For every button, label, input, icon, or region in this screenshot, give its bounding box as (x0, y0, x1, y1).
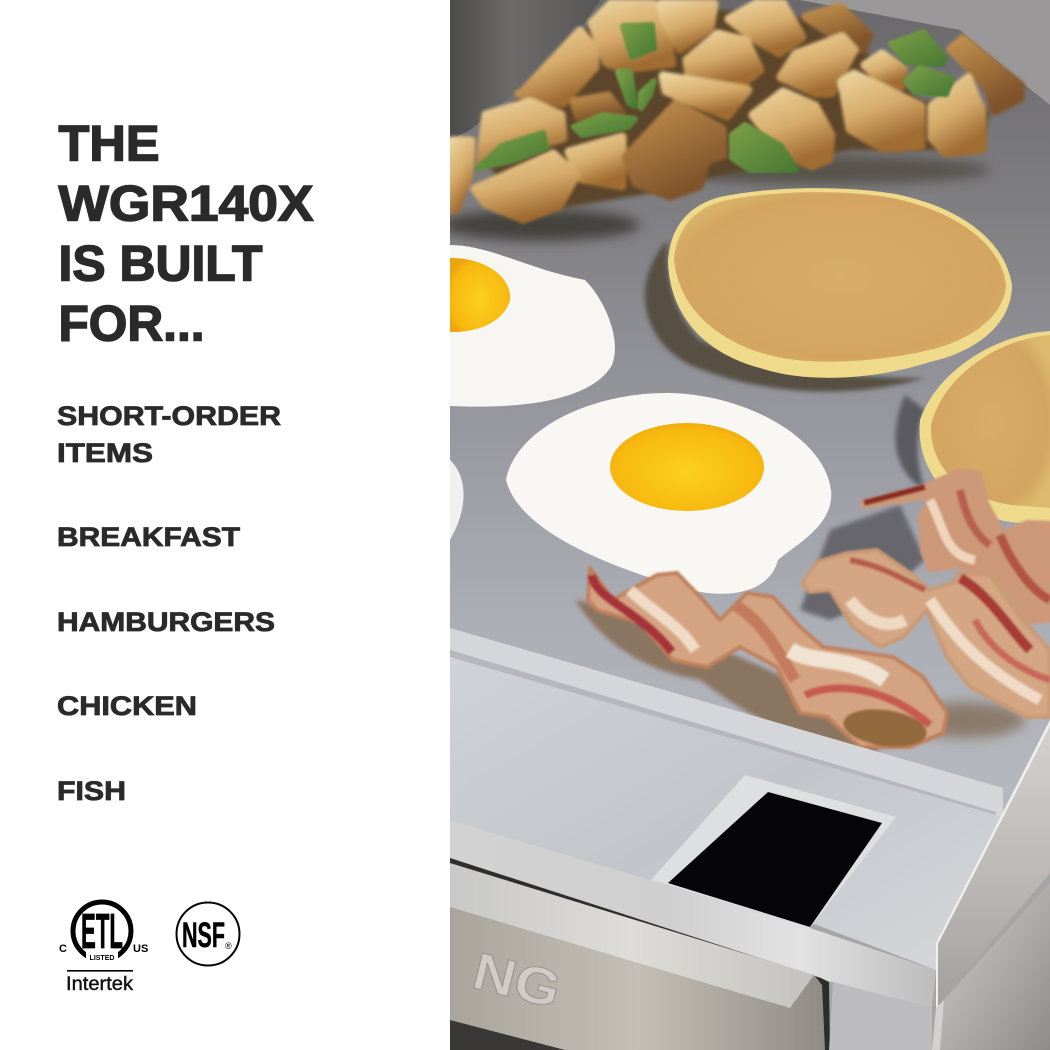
griddle surface (450, 0, 1050, 830)
icon: ETL Intertek certification mark: Intertek (66, 974, 134, 995)
item: chicken: CHICKEN (57, 691, 197, 721)
icon: ETL Intertek certification mark: C (59, 943, 67, 955)
item: short-order items (57, 401, 281, 468)
dark gaps behind potatoes (480, 10, 990, 215)
bottom dark slit (450, 1020, 565, 1050)
photo base (484, 830, 1050, 1050)
lower lip (450, 820, 936, 1008)
embossed lettering: NG (467, 942, 567, 1020)
icon: ETL Intertek certification mark: LISTED (90, 955, 114, 962)
backsplash right (800, 0, 1050, 105)
egg fragment (450, 460, 464, 540)
griddle edge shade (450, 650, 996, 816)
lower side plate (829, 982, 932, 1050)
lower body (450, 908, 825, 1050)
heading: WGR140X (58, 176, 314, 232)
item: fish: FISH (57, 776, 126, 806)
heading: THE (58, 116, 160, 172)
left white panel (0, 0, 450, 1050)
griddle shadows (440, 156, 1025, 752)
bacon front (588, 568, 947, 752)
fascia top band (450, 863, 814, 1008)
list of uses (57, 401, 281, 806)
shadow gap below lip (450, 858, 830, 1050)
pancake right (920, 331, 1050, 526)
potatoes (450, 4, 1020, 219)
icon: ETL Intertek certification mark: US (133, 943, 148, 955)
egg left (450, 245, 615, 407)
icon: NSF certification mark: ® (225, 941, 232, 951)
photo: griddle with breakfast food (440, 0, 1050, 1050)
splash guard (932, 720, 1050, 1050)
icon: ETL Intertek certification mark: ETL (81, 905, 123, 959)
icon: NSF certification mark (176, 902, 240, 966)
front panel (450, 657, 1003, 970)
drip slot (651, 775, 896, 928)
backsplash left (450, 0, 600, 140)
bacon back (862, 470, 1050, 623)
item: short-order items: ITEMS (57, 438, 153, 468)
pancake main (668, 188, 1012, 378)
icon: ETL Intertek certification mark (59, 902, 148, 995)
icon: NSF certification mark: NSF (182, 916, 225, 955)
heading: FOR... (58, 296, 204, 352)
green peppers (478, 25, 952, 170)
item: breakfast: BREAKFAST (57, 522, 241, 552)
item: short-order items: SHORT-ORDER (57, 401, 281, 431)
griddle front edge (450, 628, 1003, 817)
egg centre (506, 393, 831, 594)
heading: IS BUILT (58, 236, 262, 292)
heading (58, 116, 314, 352)
bacon mid (802, 550, 1050, 717)
item: hamburgers: HAMBURGERS (57, 607, 275, 637)
